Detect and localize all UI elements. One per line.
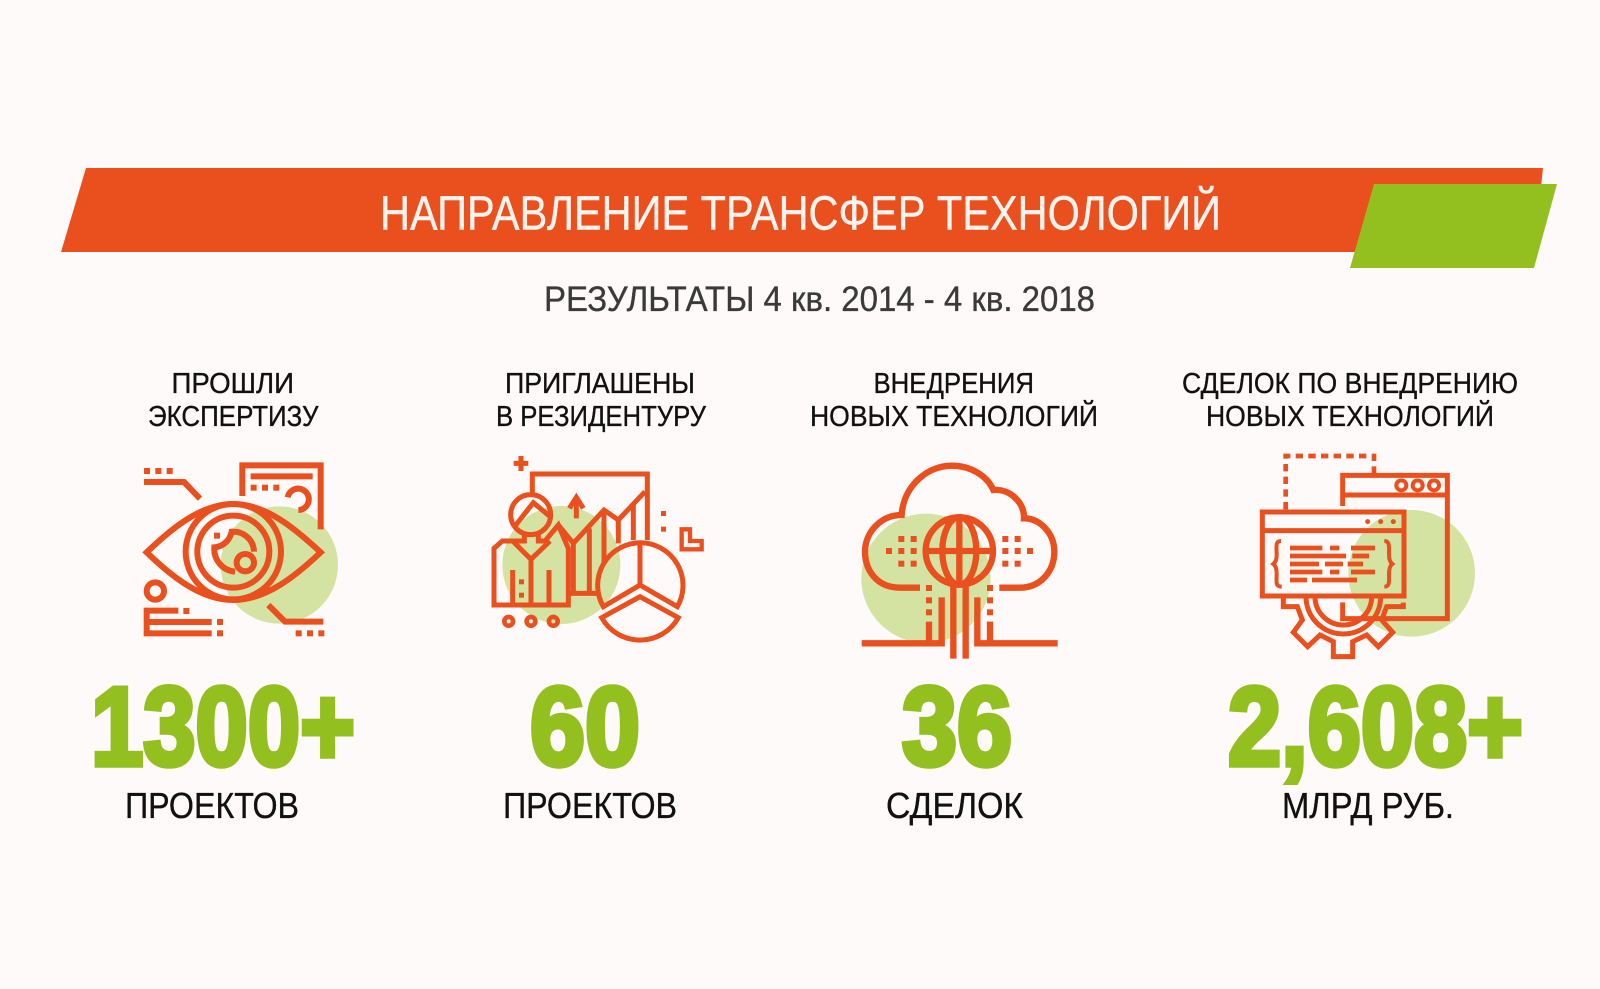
column 3 heading: ВНЕДРЕНИЯ	[874, 368, 1034, 400]
icon: eye	[144, 465, 338, 636]
column 4 heading	[1182, 368, 1518, 433]
column 1 heading: ПРОШЛИ	[172, 368, 294, 400]
icon: code windows and gear	[1262, 456, 1475, 657]
column 1 heading: ЭКСПЕРТИЗУ	[148, 401, 319, 433]
column 2 heading: ПРИГЛАШЕНЫ	[505, 368, 695, 400]
icon: cloud and globe	[861, 466, 1058, 659]
column 2 heading: В РЕЗИДЕНТУРУ	[496, 401, 707, 433]
title banner: НАПРАВЛЕНИЕ ТРАНСФЕР ТЕХНОЛОГИЙ	[380, 186, 1221, 240]
column 4 heading: СДЕЛОК ПО ВНЕДРЕНИЮ	[1182, 368, 1518, 400]
label: projects 1: ПРОЕКТОВ	[125, 785, 299, 826]
column 3 heading	[810, 368, 1098, 433]
icon: analyst with charts	[494, 456, 702, 640]
column 1 heading	[148, 368, 319, 433]
title banner	[61, 168, 1557, 268]
column 3 heading: НОВЫХ ТЕХНОЛОГИЙ	[810, 399, 1098, 433]
column 2 heading	[496, 368, 707, 433]
number: 1300+: 1300+	[91, 665, 355, 789]
label: deals: СДЕЛОК	[886, 785, 1023, 826]
label: billion rubles: МЛРД РУБ.	[1282, 785, 1454, 826]
label: projects 2: ПРОЕКТОВ	[503, 785, 677, 826]
subtitle: РЕЗУЛЬТАТЫ 4 кв. 2014 - 4 кв. 2018	[544, 279, 1095, 319]
number: 60: 60	[530, 665, 640, 789]
number: 36: 36	[902, 665, 1012, 789]
column 4 heading: НОВЫХ ТЕХНОЛОГИЙ	[1206, 399, 1494, 433]
number: 2,608+: 2,608+	[1228, 665, 1523, 789]
